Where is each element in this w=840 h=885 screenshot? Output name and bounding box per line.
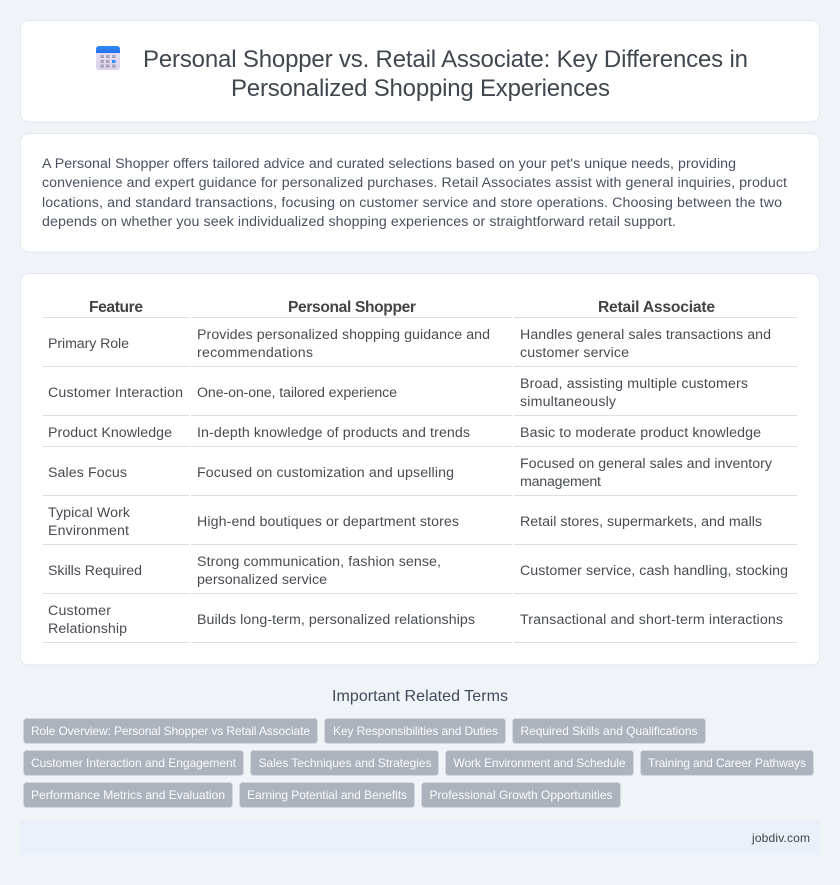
row: sales focus: Sales Focus bbox=[48, 465, 127, 481]
row: customer interaction bbox=[48, 376, 748, 410]
tag bbox=[24, 750, 244, 776]
row: primary role: Primary Role bbox=[48, 336, 129, 352]
row: customer interaction: Broad, assisting multiple customers bbox=[520, 376, 748, 392]
tag: Sales Techniques and Strategies bbox=[258, 756, 432, 770]
intro text: A Personal Shopper offers tailored advice and curated selections based on your pet's unique needs, providing bbox=[42, 156, 736, 172]
row: sales focus: Focused on customization and upselling bbox=[197, 465, 454, 481]
row: product knowledge: In-depth knowledge of products and trends bbox=[197, 425, 470, 441]
row: skills required: personalized service bbox=[197, 572, 327, 588]
intro text: depends on whether you seek individualized shopping experiences or straightforward retail support. bbox=[42, 214, 676, 230]
tag: Work Environment and Schedule bbox=[454, 756, 626, 770]
row: customer interaction: Customer Interaction bbox=[48, 385, 183, 401]
tag: Key Responsibilities and Duties bbox=[333, 724, 498, 738]
heading: important related terms: Important Related Terms bbox=[332, 688, 508, 705]
row: customer relationship: Builds long-term, personalized relationships bbox=[197, 612, 475, 628]
title bbox=[143, 46, 748, 102]
tag bbox=[422, 782, 620, 808]
panel: comparison table bbox=[20, 274, 820, 665]
tag bbox=[24, 718, 318, 744]
row: typical work environment: High-end boutiques or department stores bbox=[197, 514, 459, 530]
tag: Required Skills and Qualifications bbox=[520, 724, 698, 738]
tag: Professional Growth Opportunities bbox=[430, 788, 612, 802]
tag bbox=[250, 750, 438, 776]
tag: Performance Metrics and Evaluation bbox=[31, 788, 225, 802]
tag bbox=[324, 718, 506, 744]
related term tags bbox=[24, 718, 814, 808]
row: product knowledge bbox=[48, 425, 761, 441]
row: skills required bbox=[48, 554, 788, 588]
footer bar bbox=[20, 821, 820, 855]
row: primary role: Handles general sales transactions and bbox=[520, 327, 771, 343]
panel: header bbox=[20, 20, 820, 122]
row: customer relationship: Customer bbox=[48, 603, 111, 619]
row: typical work environment: Typical Work bbox=[48, 505, 131, 521]
tag: Earning Potential and Benefits bbox=[247, 788, 407, 802]
row: sales focus bbox=[48, 456, 773, 490]
row: typical work environment: Retail stores, supermarkets, and malls bbox=[520, 514, 762, 530]
row: skills required: Strong communication, fashion sense, bbox=[197, 554, 441, 570]
tag bbox=[240, 782, 414, 808]
intro text: convenience and expert guidance for personalized purchases. Retail Associates assist with general inquiries, product bbox=[42, 175, 787, 191]
table header row: Personal Shopper bbox=[288, 299, 416, 316]
table header row bbox=[89, 299, 715, 316]
row: product knowledge: Basic to moderate product knowledge bbox=[520, 425, 761, 441]
tag: Customer Interaction and Engagement bbox=[31, 756, 237, 770]
row: skills required: Customer service, cash handling, stocking bbox=[520, 563, 788, 579]
row: customer relationship: Relationship bbox=[48, 621, 127, 637]
panel: intro paragraph bbox=[20, 134, 820, 252]
row: skills required: Skills Required bbox=[48, 563, 142, 579]
table header row: Retail Associate bbox=[598, 299, 715, 316]
row: product knowledge: Product Knowledge bbox=[48, 425, 172, 441]
row: primary role: customer service bbox=[520, 345, 629, 361]
row: primary role: recommendations bbox=[197, 345, 313, 361]
row: sales focus: management bbox=[520, 474, 601, 490]
row: primary role bbox=[48, 327, 771, 361]
tag bbox=[640, 750, 814, 776]
icon: calendar bbox=[96, 46, 120, 70]
title: Personalized Shopping Experiences bbox=[231, 75, 610, 102]
tag bbox=[446, 750, 634, 776]
row: sales focus: Focused on general sales and inventory bbox=[520, 456, 773, 472]
row: customer interaction: simultaneously bbox=[520, 394, 617, 410]
table header row: Feature bbox=[89, 299, 143, 316]
title: Personal Shopper vs. Retail Associate: Key Differences in bbox=[143, 46, 748, 73]
intro text bbox=[42, 156, 787, 230]
intro text: locations, and standard transactions, focusing on customer service and store operations. Choosing between the two bbox=[42, 195, 782, 211]
row: customer relationship bbox=[48, 603, 783, 637]
tag bbox=[24, 782, 232, 808]
row: customer interaction: One-on-one, tailored experience bbox=[197, 385, 397, 401]
tag: Training and Career Pathways bbox=[648, 756, 806, 770]
tag: Role Overview: Personal Shopper vs Retail Associate bbox=[31, 724, 310, 738]
footer source: jobdiv.com bbox=[751, 831, 810, 845]
row: primary role: Provides personalized shopping guidance and bbox=[197, 327, 490, 343]
row: typical work environment: Environment bbox=[48, 523, 129, 539]
tag bbox=[512, 718, 706, 744]
row: typical work environment bbox=[48, 505, 762, 539]
row: customer relationship: Transactional and short-term interactions bbox=[520, 612, 783, 628]
